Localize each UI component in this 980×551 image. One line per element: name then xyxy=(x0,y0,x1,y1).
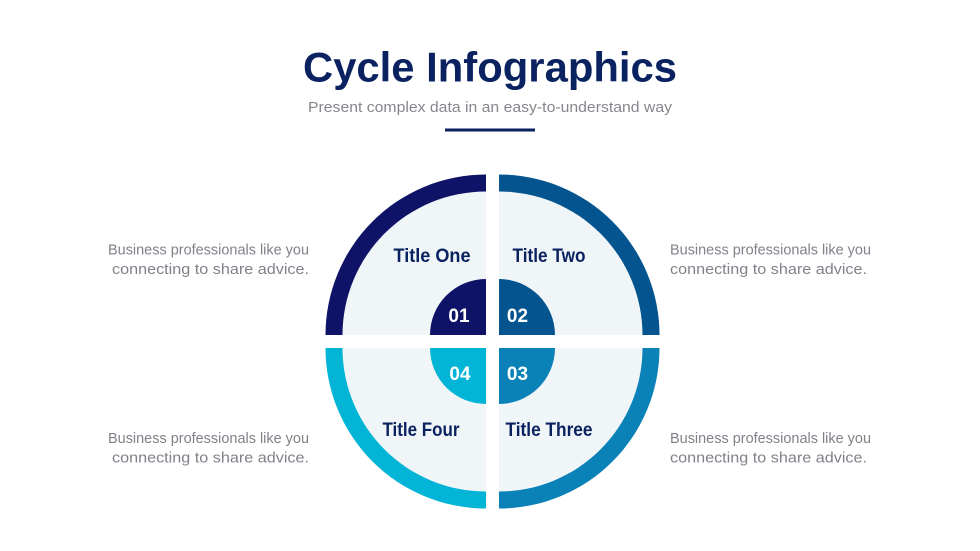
text block: bottom left: connecting to share advice. xyxy=(112,450,309,466)
text block: top right: Business professionals like you xyxy=(670,242,871,258)
quadrant four: Title Four xyxy=(382,420,460,441)
quadrant two xyxy=(499,174,660,335)
text block: bottom right: connecting to share advice. xyxy=(670,450,867,466)
text block: top right: connecting to share advice. xyxy=(670,262,867,278)
quadrant two: Title Two xyxy=(512,246,586,267)
subtitle: Present complex data in an easy-to-understand way xyxy=(308,99,673,116)
title underline xyxy=(445,128,535,132)
text block: top left: Business professionals like you xyxy=(108,242,309,258)
text block: top left: connecting to share advice. xyxy=(112,262,309,278)
title: Cycle Infographics xyxy=(303,44,677,90)
quadrant four xyxy=(326,348,486,508)
quadrant one: 01 xyxy=(448,306,470,327)
quadrant two: 02 xyxy=(507,306,528,327)
quadrant one: Title One xyxy=(394,246,470,267)
quadrant three: 03 xyxy=(507,364,528,385)
quadrant four: 04 xyxy=(449,364,471,385)
quadrant one xyxy=(326,174,486,335)
text block: bottom right: Business professionals like you xyxy=(670,431,871,447)
quadrant three xyxy=(499,348,660,508)
quadrant three: Title Three xyxy=(506,420,592,441)
text block: bottom left: Business professionals like you xyxy=(108,431,309,447)
